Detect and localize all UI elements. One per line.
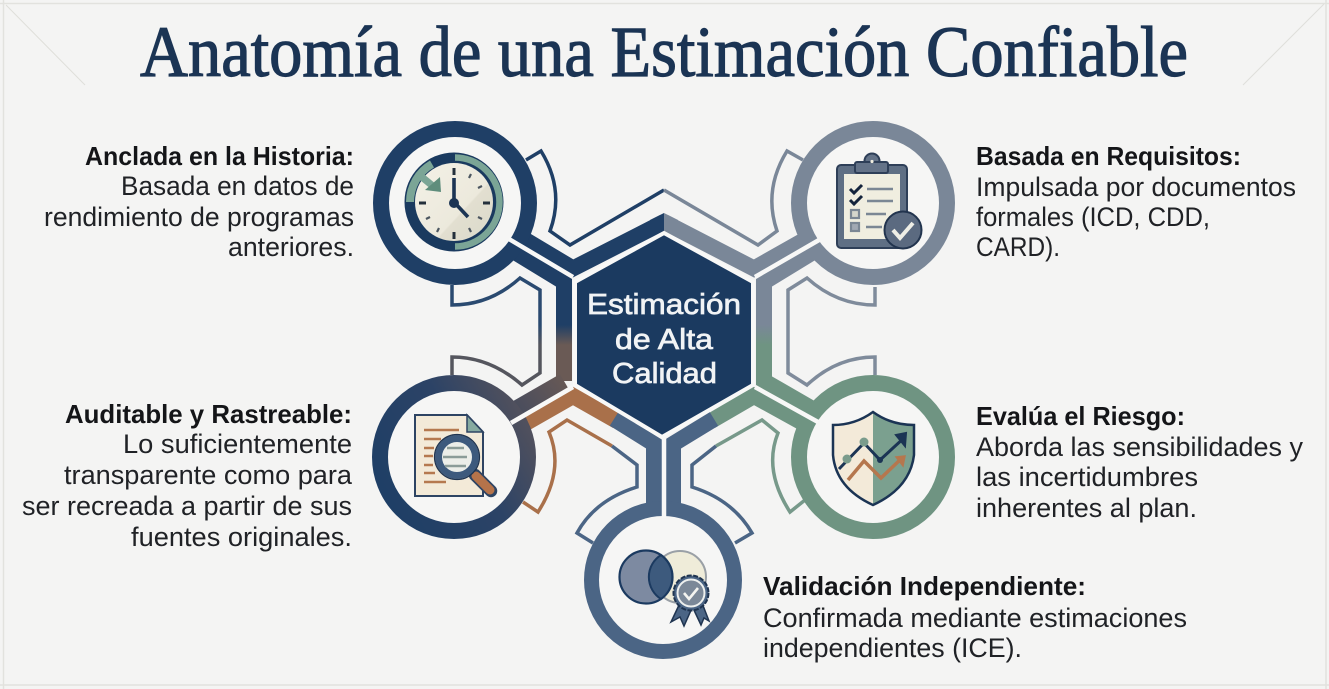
text: basada en requisitos: Basada en Requisitos: — [976, 141, 1241, 171]
ring: history — [381, 129, 529, 277]
ring: requirements — [799, 129, 947, 277]
text: auditable y rastreable: ser recreada a partir de sus — [22, 491, 352, 521]
text: evalua el riesgo: las incertidumbres — [976, 462, 1198, 492]
centre label — [587, 289, 741, 390]
text: evalua el riesgo — [976, 401, 1304, 523]
text: evalua el riesgo: Evalúa el Riesgo: — [976, 401, 1185, 431]
ring: auditable — [380, 383, 528, 531]
centre label: de Alta — [615, 324, 714, 356]
text: validacion independiente — [763, 571, 1187, 663]
icon: shield with chart — [833, 412, 914, 505]
text: anclada en la historia: Anclada en la Historia: — [85, 141, 354, 171]
text: auditable y rastreable: Auditable y Rastreable: — [65, 399, 352, 429]
text: anclada en la historia: rendimiento de programas — [44, 202, 354, 232]
ring: validation — [592, 508, 734, 652]
text: auditable y rastreable: fuentes originales. — [131, 522, 352, 552]
text: anclada en la historia: Basada en datos de — [121, 171, 354, 201]
icon: overlapping circles and badge — [620, 550, 709, 626]
connector outline: top — [452, 151, 875, 543]
text: evalua el riesgo: inherentes al plan. — [976, 493, 1197, 523]
text: auditable y rastreable: transparente como para — [64, 460, 352, 490]
icon: clipboard — [837, 154, 922, 248]
apex of top band — [650, 213, 678, 232]
connector bands — [505, 222, 823, 512]
icon: clock — [404, 152, 504, 252]
ring: risk — [799, 383, 947, 531]
hexagon centre — [575, 233, 753, 437]
icon: document and magnifier — [415, 415, 491, 496]
text: evalua el riesgo: Aborda las sensibilidades y — [976, 432, 1304, 462]
text: auditable y rastreable — [22, 399, 352, 552]
text: validacion independiente: Validación Independiente: — [763, 571, 1086, 601]
text: basada en requisitos — [976, 141, 1296, 262]
centre label: Calidad — [612, 358, 717, 390]
text: auditable y rastreable: Lo suficientemente — [123, 429, 352, 459]
text: anclada en la historia: anteriores. — [228, 232, 354, 262]
text: validacion independiente: independientes (ICE). — [763, 633, 1022, 663]
text: basada en requisitos: CARD). — [976, 232, 1060, 262]
title: Anatomía de una Estimación Confiable — [140, 12, 1188, 92]
central diagram — [380, 129, 947, 652]
connector gaps — [509, 239, 819, 518]
text: validacion independiente: Confirmada mediante estimaciones — [763, 603, 1187, 633]
text: basada en requisitos: formales (ICD, CDD, — [976, 202, 1210, 232]
text: anclada en la historia — [44, 141, 354, 262]
centre label: Estimación — [587, 289, 741, 321]
text: basada en requisitos: Impulsada por documentos — [976, 172, 1296, 202]
